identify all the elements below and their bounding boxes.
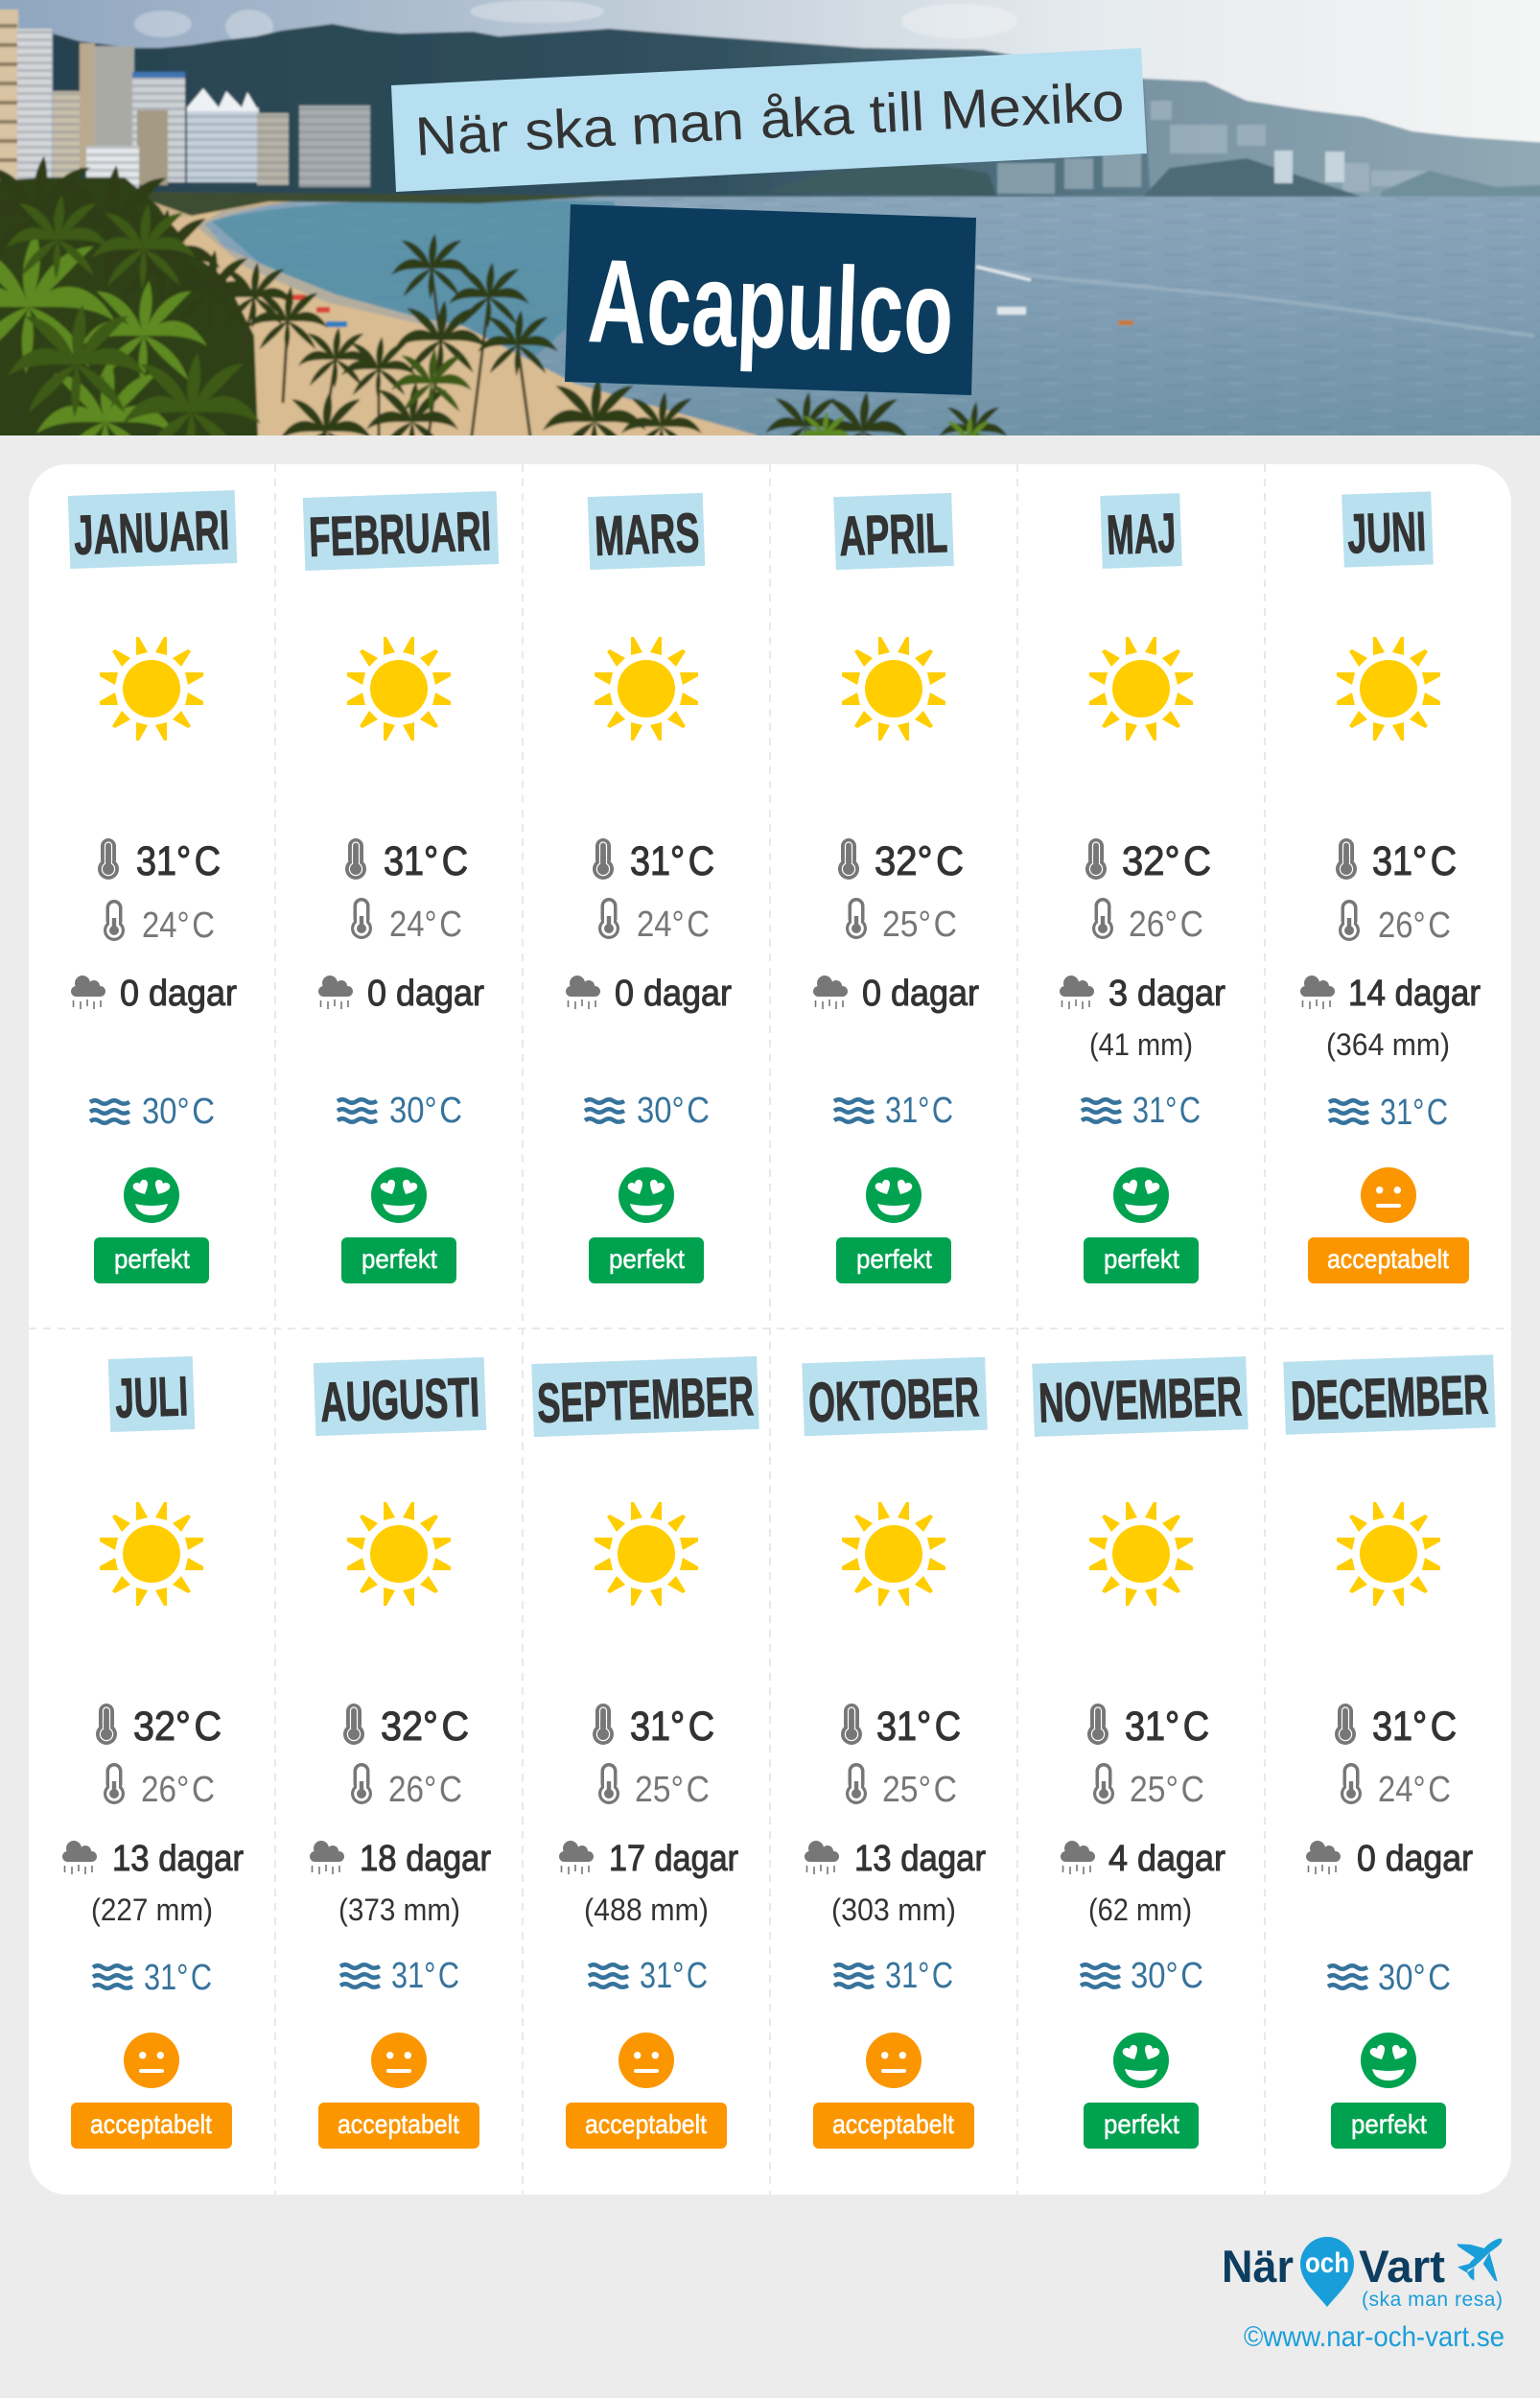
- min temperature: 25°C: [1130, 1770, 1204, 1810]
- min temperature: [598, 898, 710, 945]
- water temperature: [1328, 1958, 1451, 1998]
- month heading: [531, 1356, 759, 1437]
- rain days: [62, 1839, 244, 1879]
- max temperature: [1336, 838, 1457, 884]
- rain days: [813, 974, 979, 1014]
- max temperature: [838, 838, 964, 884]
- water temperature: [90, 1092, 215, 1132]
- logo: När och Vart: och: [1305, 2247, 1349, 2279]
- max temperature: 32°C: [133, 1704, 222, 1750]
- rain days: 0 dagar: [1357, 1839, 1473, 1879]
- water temperature: 31°C: [1380, 1093, 1448, 1133]
- month heading: SEPTEMBER: [536, 1365, 755, 1435]
- rain days: [310, 1839, 491, 1879]
- water temperature: [340, 1956, 459, 1996]
- rating: perfekt: [1084, 1167, 1199, 1283]
- rain days: [566, 974, 732, 1014]
- water temperature: [93, 1958, 212, 1998]
- water temperature: 31°C: [885, 1091, 953, 1131]
- rating: perfekt: perfekt: [1351, 2109, 1427, 2139]
- max temperature: 31°C: [630, 1704, 714, 1750]
- month heading: [303, 491, 499, 571]
- max temperature: 31°C: [136, 838, 221, 884]
- month heading: MARS: [594, 502, 700, 568]
- rating: perfekt: perfekt: [1104, 2109, 1179, 2139]
- min temperature: [1092, 898, 1203, 945]
- rating: acceptabelt: acceptabelt: [338, 2109, 459, 2139]
- rain days: 4 dagar: [1108, 1839, 1225, 1879]
- logo: När och Vart: Vart: [1359, 2241, 1445, 2292]
- rating: acceptabelt: [566, 2033, 727, 2149]
- water temperature: 30°C: [637, 1091, 710, 1131]
- min temperature: 25°C: [635, 1770, 710, 1810]
- water temperature: 30°C: [142, 1092, 215, 1132]
- icon: sun: [100, 637, 203, 741]
- logo: När och Vart: (ska man resa): [1362, 2289, 1503, 2311]
- panel: maj: [1060, 493, 1225, 1283]
- rain days: 0 dagar: [120, 974, 237, 1014]
- water temperature: [834, 1091, 953, 1131]
- min temperature: [846, 1763, 957, 1810]
- min temperature: [104, 1763, 215, 1810]
- rating: acceptabelt: [318, 2033, 479, 2149]
- website credit: ©www.nar-och-vart.se: [1244, 2321, 1505, 2353]
- rain days: 3 dagar: [1108, 974, 1225, 1014]
- max temperature: [1087, 1704, 1209, 1750]
- water temperature: 30°C: [389, 1091, 462, 1131]
- water temperature: [338, 1091, 462, 1131]
- rating: acceptabelt: [813, 2033, 974, 2149]
- month heading: [1032, 1356, 1248, 1437]
- rain days: 13 dagar: [112, 1839, 244, 1879]
- min temperature: 26°C: [1129, 905, 1203, 945]
- month heading: [833, 493, 954, 570]
- panel: november: [1032, 1356, 1248, 2149]
- rain days: 0 dagar: [615, 974, 732, 1014]
- max temperature: [96, 1704, 222, 1750]
- icon: sun: [595, 1502, 698, 1606]
- rain amount: (373 mm): [338, 1893, 460, 1927]
- rating: perfekt: [836, 1167, 951, 1283]
- water temperature: [834, 1956, 953, 1996]
- header photo: Acapulco bay: [0, 0, 1540, 475]
- rating: acceptabelt: acceptabelt: [832, 2109, 954, 2139]
- panel: juni: [1300, 491, 1481, 1283]
- rating: acceptabelt: [1308, 1167, 1469, 1283]
- rating: perfekt: perfekt: [114, 1244, 190, 1274]
- water temperature: 31°C: [640, 1956, 708, 1996]
- rain days: [1306, 1839, 1473, 1879]
- month heading: JUNI: [1346, 501, 1427, 565]
- min temperature: [1341, 1763, 1451, 1810]
- max temperature: [593, 1704, 714, 1750]
- icon: sun: [100, 1502, 203, 1606]
- rain amount: (62 mm): [1088, 1893, 1192, 1927]
- water temperature: [1081, 1956, 1203, 1996]
- panel: april: [813, 493, 979, 1283]
- icon: airplane: [1457, 2239, 1502, 2282]
- title banner: [391, 48, 1147, 192]
- water temperature: 31°C: [1132, 1091, 1201, 1131]
- month heading: NOVEMBER: [1038, 1365, 1243, 1435]
- rating: perfekt: [94, 1167, 209, 1283]
- rain days: [1061, 1839, 1225, 1879]
- month heading: MAJ: [1106, 502, 1177, 567]
- min temperature: 25°C: [882, 905, 957, 945]
- icon: sun: [1089, 1502, 1193, 1606]
- rain days: [1060, 974, 1225, 1014]
- water temperature: 31°C: [391, 1956, 459, 1996]
- min temperature: 26°C: [141, 1770, 215, 1810]
- rain days: 17 dagar: [609, 1839, 738, 1879]
- rain days: 0 dagar: [862, 974, 979, 1014]
- water temperature: [1082, 1091, 1201, 1131]
- rating: perfekt: [341, 1167, 456, 1283]
- rating: perfekt: [1331, 2033, 1446, 2149]
- panel: oktober: [802, 1357, 988, 2149]
- min temperature: 26°C: [388, 1770, 462, 1810]
- min temperature: [846, 898, 957, 945]
- panel: augusti: [310, 1357, 491, 2149]
- month heading: [802, 1357, 988, 1436]
- max temperature: [593, 838, 714, 884]
- water temperature: 30°C: [1378, 1958, 1451, 1998]
- rain days: 13 dagar: [854, 1839, 986, 1879]
- rain amount: (227 mm): [91, 1893, 213, 1927]
- rain days: 14 dagar: [1348, 974, 1481, 1014]
- rain amount: (41 mm): [1089, 1027, 1193, 1062]
- rain days: [559, 1839, 738, 1879]
- rating: perfekt: perfekt: [362, 1244, 437, 1274]
- panel: september: [531, 1356, 759, 2149]
- icon: sun: [842, 637, 945, 741]
- icon: sun: [347, 637, 451, 741]
- rating: perfekt: [1084, 2033, 1199, 2149]
- max temperature: [1335, 1704, 1457, 1750]
- max temperature: 32°C: [875, 838, 964, 884]
- month heading: [314, 1357, 486, 1436]
- icon: map pin: [1300, 2237, 1354, 2307]
- min temperature: 24°C: [389, 905, 462, 945]
- month heading: [588, 493, 705, 570]
- max temperature: 31°C: [1372, 1704, 1457, 1750]
- city title: Acapulco: [586, 235, 955, 380]
- rating: perfekt: [589, 1167, 704, 1283]
- max temperature: [1085, 838, 1211, 884]
- min temperature: [351, 1763, 462, 1810]
- month heading: AUGUSTI: [319, 1366, 480, 1434]
- max temperature: [841, 1704, 961, 1750]
- max temperature: 31°C: [1125, 1704, 1209, 1750]
- calendar card: [29, 464, 1511, 2195]
- min temperature: 24°C: [637, 905, 710, 945]
- min temperature: [351, 898, 462, 945]
- rain amount: (364 mm): [1326, 1027, 1450, 1062]
- max temperature: 32°C: [1122, 838, 1211, 884]
- city title: [565, 204, 976, 395]
- min temperature: [1339, 900, 1451, 946]
- month heading: [1342, 491, 1434, 568]
- max temperature: [345, 838, 468, 884]
- rain amount: (303 mm): [831, 1893, 956, 1927]
- min temperature: 24°C: [1378, 1770, 1451, 1810]
- icon: sun: [1337, 1502, 1440, 1606]
- icon: sun: [595, 637, 698, 741]
- panel: mars: [566, 493, 732, 1283]
- rating: acceptabelt: acceptabelt: [585, 2109, 707, 2139]
- panel: februari: [303, 491, 499, 1283]
- water temperature: [589, 1956, 708, 1996]
- month heading: JULI: [114, 1365, 189, 1430]
- rain days: 18 dagar: [360, 1839, 491, 1879]
- panel: december: [1283, 1354, 1496, 2149]
- max temperature: [98, 838, 221, 884]
- min temperature: 24°C: [142, 905, 215, 946]
- rain days: [1300, 974, 1481, 1014]
- max temperature: 31°C: [630, 838, 714, 884]
- max temperature: 31°C: [1372, 838, 1457, 884]
- max temperature: 32°C: [381, 1704, 469, 1750]
- min temperature: [104, 900, 215, 946]
- max temperature: [343, 1704, 469, 1750]
- icon: sun: [842, 1502, 945, 1606]
- month heading: [108, 1356, 195, 1432]
- month heading: [1100, 493, 1182, 569]
- rain days: 0 dagar: [367, 974, 484, 1014]
- month heading: JANUARI: [73, 499, 230, 567]
- month heading: FEBRUARI: [308, 500, 492, 569]
- min temperature: 25°C: [882, 1770, 957, 1810]
- icon: sun: [1337, 637, 1440, 741]
- rating: acceptabelt: acceptabelt: [90, 2109, 212, 2139]
- rating: acceptabelt: [71, 2033, 232, 2149]
- logo: När och Vart: [1222, 2237, 1503, 2311]
- rating: perfekt: perfekt: [856, 1244, 932, 1274]
- month heading: [68, 490, 237, 569]
- logo: När och Vart: När: [1222, 2241, 1294, 2292]
- rain days: [805, 1839, 986, 1879]
- water temperature: [585, 1091, 710, 1131]
- water temperature: 31°C: [144, 1958, 212, 1998]
- min temperature: [1093, 1763, 1204, 1810]
- min temperature: 26°C: [1378, 905, 1451, 946]
- panel: januari: [68, 490, 237, 1283]
- water temperature: 30°C: [1131, 1956, 1203, 1996]
- rating: perfekt: perfekt: [609, 1244, 685, 1274]
- icon: sun: [1089, 637, 1193, 741]
- icon: sun: [347, 1502, 451, 1606]
- rating: acceptabelt: acceptabelt: [1327, 1244, 1449, 1274]
- water temperature: [1329, 1093, 1448, 1133]
- rain days: [71, 974, 237, 1014]
- title banner: När ska man åka till Mexiko: [413, 71, 1126, 168]
- month heading: OKTOBER: [807, 1366, 980, 1434]
- min temperature: [598, 1763, 710, 1810]
- month heading: APRIL: [838, 502, 948, 568]
- rain amount: (488 mm): [584, 1893, 709, 1927]
- panel: juli: [62, 1356, 244, 2149]
- max temperature: 31°C: [876, 1704, 961, 1750]
- max temperature: 31°C: [384, 838, 468, 884]
- rating: perfekt: perfekt: [1104, 1244, 1179, 1274]
- rain days: [318, 974, 484, 1014]
- water temperature: 31°C: [885, 1956, 953, 1996]
